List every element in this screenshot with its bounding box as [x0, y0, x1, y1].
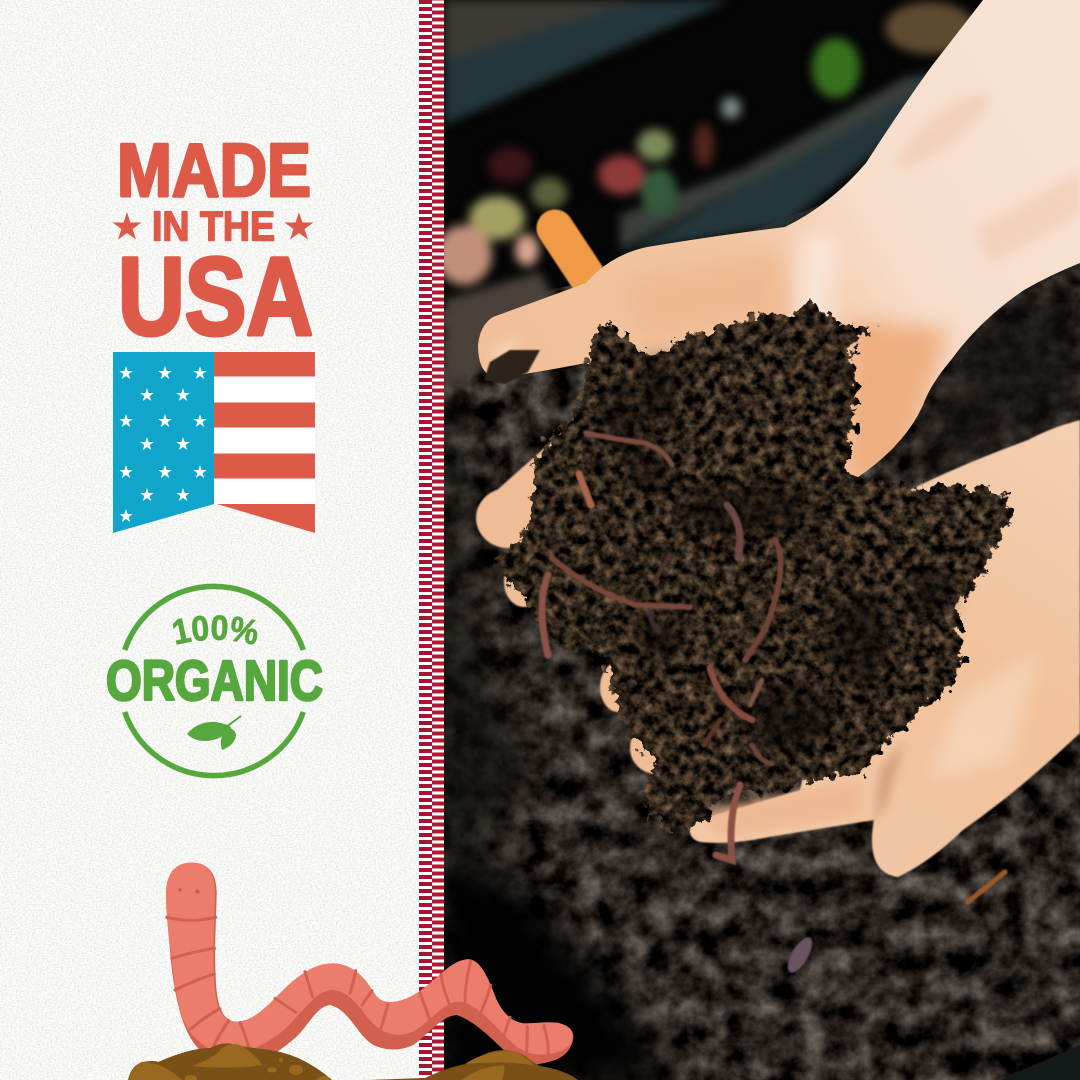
- background soil: [748, 204, 1080, 270]
- heading: IN THE: IN THE: [152, 202, 275, 250]
- worm segments: [167, 917, 548, 1053]
- icon: right star: [284, 212, 314, 240]
- text: 100%: 100%: [172, 615, 258, 645]
- shadowed soil areas: [430, 280, 1080, 1080]
- compost bin and scraps, blurred: [436, 0, 990, 390]
- twig: [968, 872, 1005, 902]
- zigzag stitched border: [419, 0, 444, 1080]
- heading: ORGANIC: ORGANIC: [106, 649, 323, 713]
- illustration: cartoon worm on soil: [166, 863, 573, 1065]
- bin corner: [1000, 1045, 1080, 1080]
- badge ring bottom arc: [125, 712, 303, 776]
- flag stars: [119, 366, 207, 522]
- heading: MADE: MADE: [117, 128, 311, 212]
- icon: orange finger: [555, 228, 586, 275]
- panel: compost photo: [430, 0, 1080, 1080]
- badge: 100% organic: [106, 584, 323, 778]
- illustration: right soil mound: [368, 1050, 578, 1080]
- earthworms: [542, 433, 781, 860]
- worm body light side: [166, 863, 573, 1055]
- soil pile held in hands: [492, 298, 1011, 832]
- worm eyes: [178, 888, 182, 892]
- upper glove hand: [470, 0, 1080, 490]
- soil crumbs on thumb: [484, 350, 540, 384]
- panel: fabric background: [0, 0, 420, 1080]
- icon: american flag banner: [113, 352, 315, 533]
- lower glove hand: [476, 392, 1080, 877]
- illustration: left soil mound: [128, 1043, 332, 1080]
- icon: leaves: [187, 716, 241, 750]
- badge ring top arc: [125, 586, 303, 650]
- badge: made in the usa: [112, 128, 314, 358]
- icon: left star: [112, 212, 142, 240]
- heading: USA: USA: [118, 236, 313, 358]
- glove fingertips: [475, 407, 656, 775]
- worm body shadow side: [166, 863, 573, 1065]
